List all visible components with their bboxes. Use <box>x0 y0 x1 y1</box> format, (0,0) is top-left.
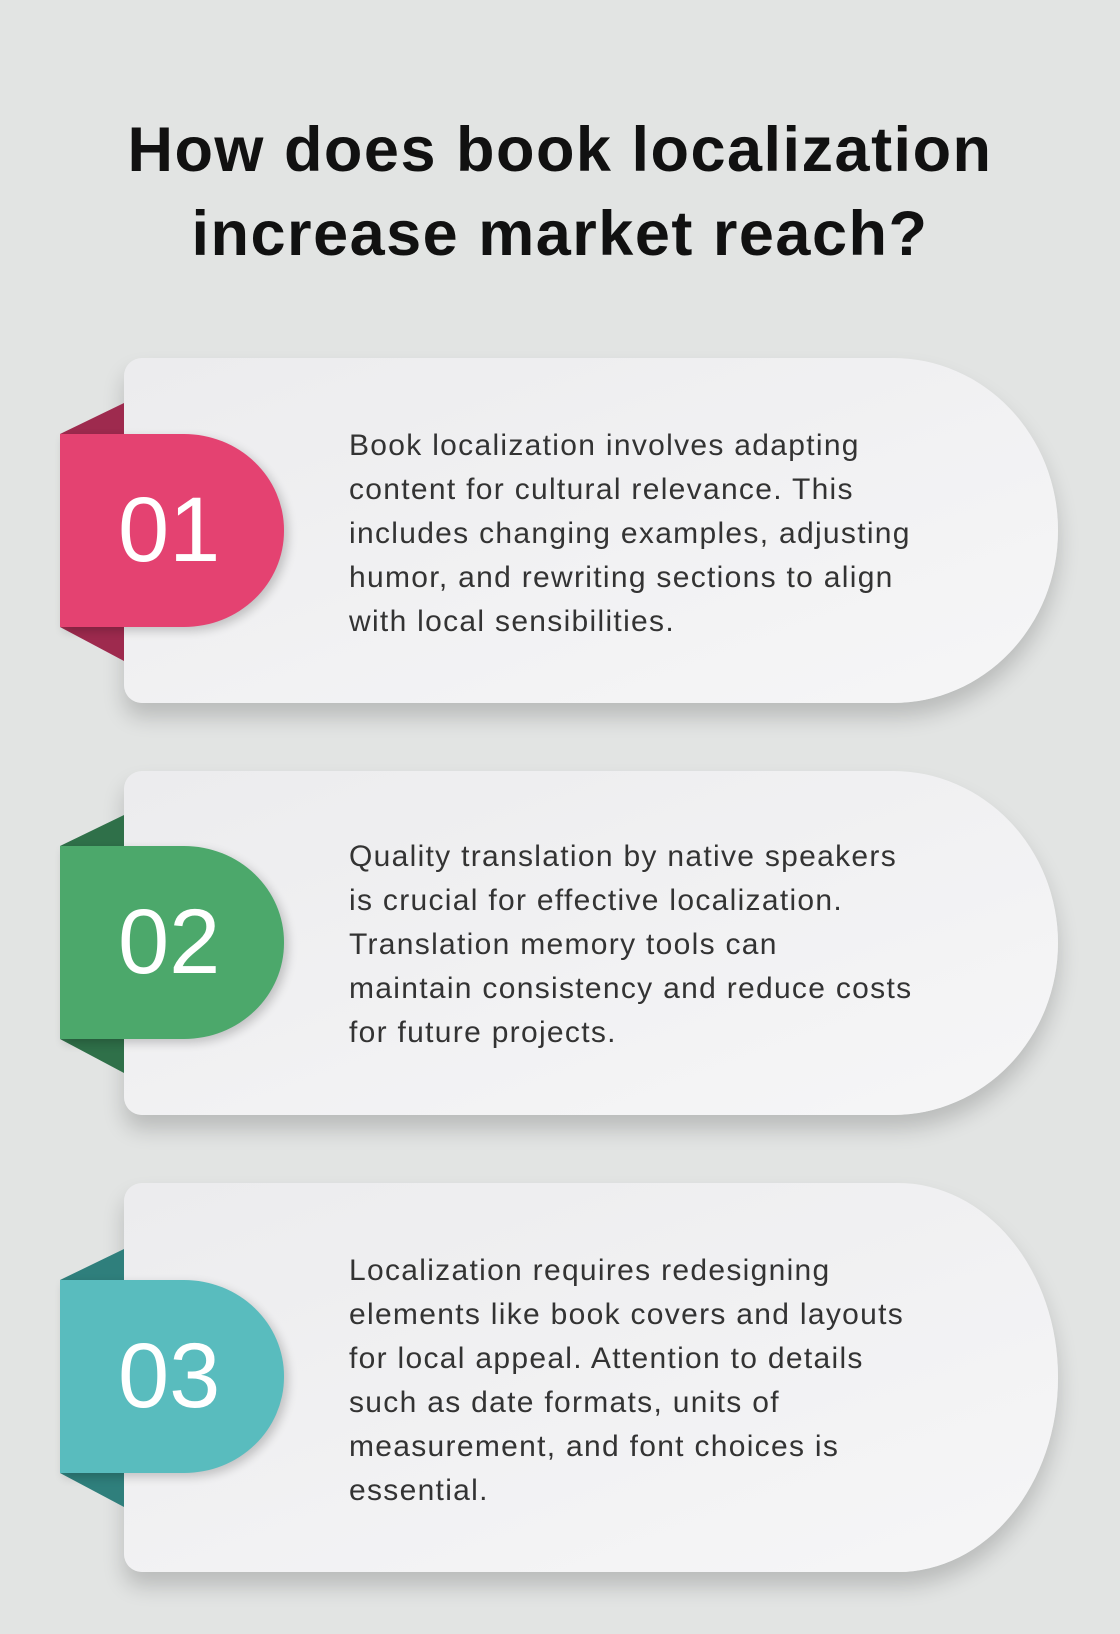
panel: card 1 <box>124 358 1058 703</box>
text block 2: is crucial for effective localization. <box>349 884 843 917</box>
title: increase market reach? <box>192 199 928 269</box>
text block 3: essential. <box>349 1474 489 1507</box>
text block 3: such as date formats, units of <box>349 1386 780 1419</box>
tab 02 <box>60 846 284 1039</box>
text block 3: for local appeal. Attention to details <box>349 1342 864 1375</box>
text block 1: content for cultural relevance. This <box>349 473 854 506</box>
text block 2: for future projects. <box>349 1016 617 1049</box>
text block 3: measurement, and font choices is <box>349 1430 839 1463</box>
title: How does book localization <box>127 115 993 185</box>
tab 03 <box>60 1280 284 1473</box>
text block 2 <box>349 840 912 1049</box>
text block 2: Translation memory tools can <box>349 928 778 961</box>
text block 2: maintain consistency and reduce costs <box>349 972 912 1005</box>
text block 1 <box>349 429 911 638</box>
tab 03: 03 <box>118 1325 220 1427</box>
tab 01 <box>60 434 284 627</box>
text block 3: elements like book covers and layouts <box>349 1298 904 1331</box>
text block 2: Quality translation by native speakers <box>349 840 897 873</box>
text block 1: Book localization involves adapting <box>349 429 860 462</box>
fold 3 <box>60 1249 124 1507</box>
text block 1: includes changing examples, adjusting <box>349 517 911 550</box>
tab 02: 02 <box>118 891 220 993</box>
text block 1: with local sensibilities. <box>349 605 675 638</box>
fold 1 <box>60 403 124 661</box>
panel: card 2 <box>124 771 1058 1115</box>
text block 3 <box>349 1254 904 1507</box>
title <box>127 115 993 269</box>
text block 3: Localization requires redesigning <box>349 1254 831 1287</box>
tab 01: 01 <box>118 479 220 581</box>
fold 2 <box>60 815 124 1073</box>
panel: card 3 <box>124 1183 1058 1572</box>
text block 1: humor, and rewriting sections to align <box>349 561 894 594</box>
